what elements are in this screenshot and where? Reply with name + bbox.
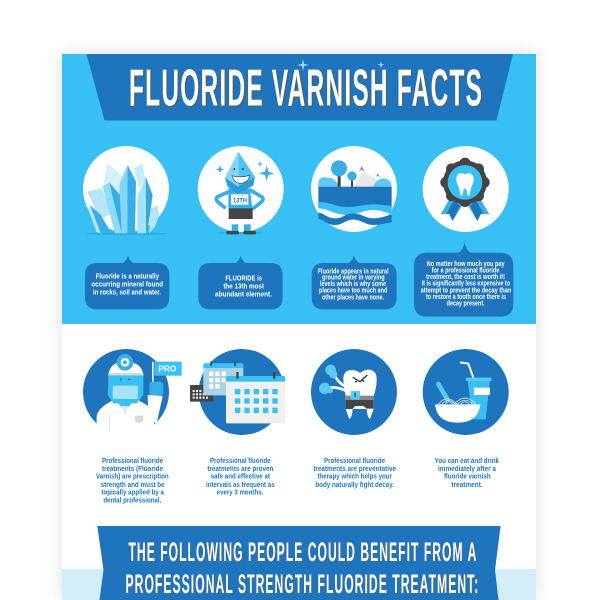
text: preventative therapy: therapy which helps your [317, 474, 392, 481]
text: eat and drink: treatment. [451, 482, 483, 489]
callout: cost is worth it: treatment, the cost is worth it! [426, 274, 505, 281]
icon: crystals [83, 146, 169, 235]
text: safe and effective: Professional fluoride [210, 458, 271, 465]
callout: ground water levels: other places have none. [322, 295, 384, 302]
text: preventative therapy: body naturally fight decay. [315, 482, 394, 489]
callout: ground water levels: Fluoride appears in natural [318, 268, 389, 275]
text: prescription strength: dental professional. [103, 497, 161, 504]
icon: calendars [190, 349, 285, 435]
callout: naturally occurring: occurring mineral found [91, 282, 163, 289]
text: preventative therapy [313, 458, 396, 489]
panel: fluoride facts blue section [62, 54, 536, 324]
icon: landscape with ground water [311, 146, 397, 232]
text: eat and drink: You can eat and drink [435, 458, 499, 465]
icon: 13th element mascot [198, 146, 284, 234]
heading banner: who could benefit: PROFESSIONAL STRENGTH FLUORIDE TREATMENT: [126, 570, 478, 599]
text: eat and drink: fluoride varnish [444, 474, 491, 481]
callout: ground water levels: levels which is why some [320, 281, 386, 288]
callout: cost is worth it: It is significantly less expensive to [422, 281, 510, 288]
panel: light blue beneficiaries section [62, 569, 536, 600]
text: eat and drink: immediately after a [438, 466, 496, 473]
title banner: FLUORIDE VARNISH FACTS [129, 58, 482, 117]
text: preventative therapy: Professional fluoride [324, 458, 385, 465]
text: prescription strength [96, 458, 169, 504]
text: preventative therapy: treatments are preventative [313, 466, 396, 473]
text: safe and effective: intervals as frequent as [206, 482, 275, 489]
heading banner: who could benefit: THE FOLLOWING PEOPLE COULD BENEFIT FROM A [128, 538, 476, 567]
icon: boxing tooth [311, 349, 397, 435]
callout: ground water levels: ground water in varying [322, 275, 385, 282]
callout: 13th most abundant [198, 256, 283, 309]
callout: 13th most abundant: the 13th most [223, 283, 265, 290]
text: eat and drink [435, 458, 499, 489]
heading banner: who could benefit: PROFESSIONAL STRENGTH FLUORIDE TREATMENT: [126, 570, 479, 600]
callout: cost is worth it [414, 242, 513, 317]
callout: ground water levels: places have too much and [319, 288, 387, 295]
icon: 13th element mascot: 13TH [233, 197, 247, 204]
callout: naturally occurring: in rocks, soil and water. [93, 289, 161, 296]
callout: ground water levels [312, 256, 397, 309]
title banner: FLUORIDE VARNISH FACTS [130, 59, 483, 118]
callout: 13th most abundant: FLUORIDE is [225, 276, 262, 283]
heading banner: who could benefit: THE FOLLOWING PEOPLE COULD BENEFIT FROM A [129, 538, 477, 568]
callout: cost is worth it: No matter how much you pay [427, 261, 505, 268]
icon: tooth award ribbon [423, 146, 509, 232]
text: safe and effective: safe and effective at [211, 474, 271, 481]
text: prescription strength: treatments (Fluoride [102, 466, 163, 473]
callout: cost is worth it: attempt to prevent the decay than [421, 287, 511, 294]
icon: bowl of noodles and drink [423, 349, 509, 435]
callout: cost is worth it: decay present. [447, 301, 485, 308]
text: prescription strength: strength and must be [101, 482, 165, 489]
callout: cost is worth it: to restore a tooth once there is [426, 294, 506, 301]
text: prescription strength: Varnish) are prescription [96, 474, 169, 481]
icon: dental professional with PRO flag [83, 349, 182, 436]
text: prescription strength: Professional fluoride [102, 458, 163, 465]
callout: 13th most abundant: abundant element. [215, 291, 272, 298]
callout: naturally occurring: Fluoride is a naturally [96, 274, 159, 281]
callout: naturally occurring [85, 256, 169, 309]
text: safe and effective: every 3 months. [217, 490, 263, 497]
callout: cost is worth it: for a professional fluoride [432, 268, 499, 275]
text: safe and effective: treatments are proven [207, 466, 273, 473]
icon: dental professional with PRO flag: PRO [158, 365, 176, 374]
heading banner: who could benefit [97, 526, 501, 600]
text: prescription strength: topically applied by a [101, 490, 164, 497]
text: safe and effective [206, 458, 275, 497]
